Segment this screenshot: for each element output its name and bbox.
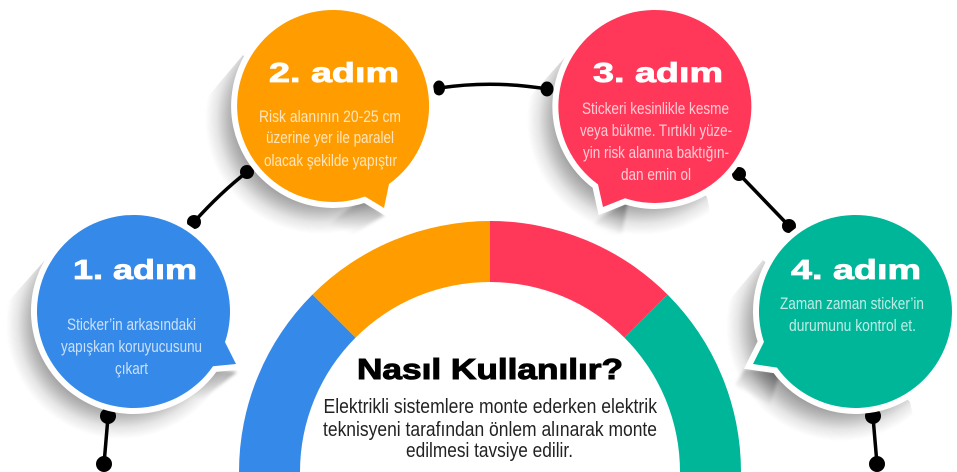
text: step 1 description: yapışkan koruyucusunu [61,338,202,356]
heading: 2. adım: 2. adım [269,57,399,88]
text: central description: teknisyeni tarafından önlem alınarak monte [323,418,657,441]
heading: 1. adım: 1. adım [73,254,197,285]
text: step 2 description: Risk alanının 20-25 cm [259,108,401,126]
text: step 3 description: Stickeri kesinlikle kesme [582,100,729,118]
text: step 2 description: olacak şekilde yapıştır [264,152,397,170]
panel: step 3 [558,10,751,207]
text: step 3 description: yin risk alanına baktığın- [583,144,729,162]
text: step 2 description [259,108,401,170]
text: step 3 description: dan emin ol [621,166,691,184]
shadow: step 4 bubble [730,260,912,437]
text: step 3 description: veya bükme. Tırtıklı yüze- [580,122,732,140]
text: step 4 description: durumunu kontrol et. [789,317,916,335]
text: step 3 description [580,100,732,184]
heading: 3. adım: 3. adım [593,57,723,88]
panel: step 1 [37,215,236,408]
connector: step 1 downward [96,408,116,472]
semicircle ring chart [239,221,741,472]
text: step 1 description [61,316,202,378]
panel: step 2 [237,10,429,208]
text: step 2 description: üzerine yer ile paralel [266,129,394,147]
text: central description [323,395,658,462]
connector: step 3 to step 4 [732,167,796,233]
text: step 1 description: çıkart [115,360,148,378]
text: step 4 description: Zaman zaman sticker’in [780,295,924,313]
text: central description: Elektrikli sistemlere monte ederken elektrik [324,395,658,418]
text: step 4 description [780,295,924,335]
panel: step 4 [753,215,952,408]
shadow: step 3 bubble [531,58,709,234]
shadow: step 1 bubble [10,260,238,435]
text: step 1 description: Sticker’in arkasındaki [67,316,196,334]
connector: step 4 downward [865,408,885,472]
title: Nasıl Kullanılır?: Nasıl Kullanılır? [357,354,623,386]
shadow: step 2 bubble [209,55,385,231]
text: central description: edilmesi tavsiye edilir. [406,439,573,462]
connector: step 1 to step 2 [187,165,254,229]
heading: 4. adım: 4. adım [791,254,921,285]
connector: step 2 to step 3 [433,80,554,96]
